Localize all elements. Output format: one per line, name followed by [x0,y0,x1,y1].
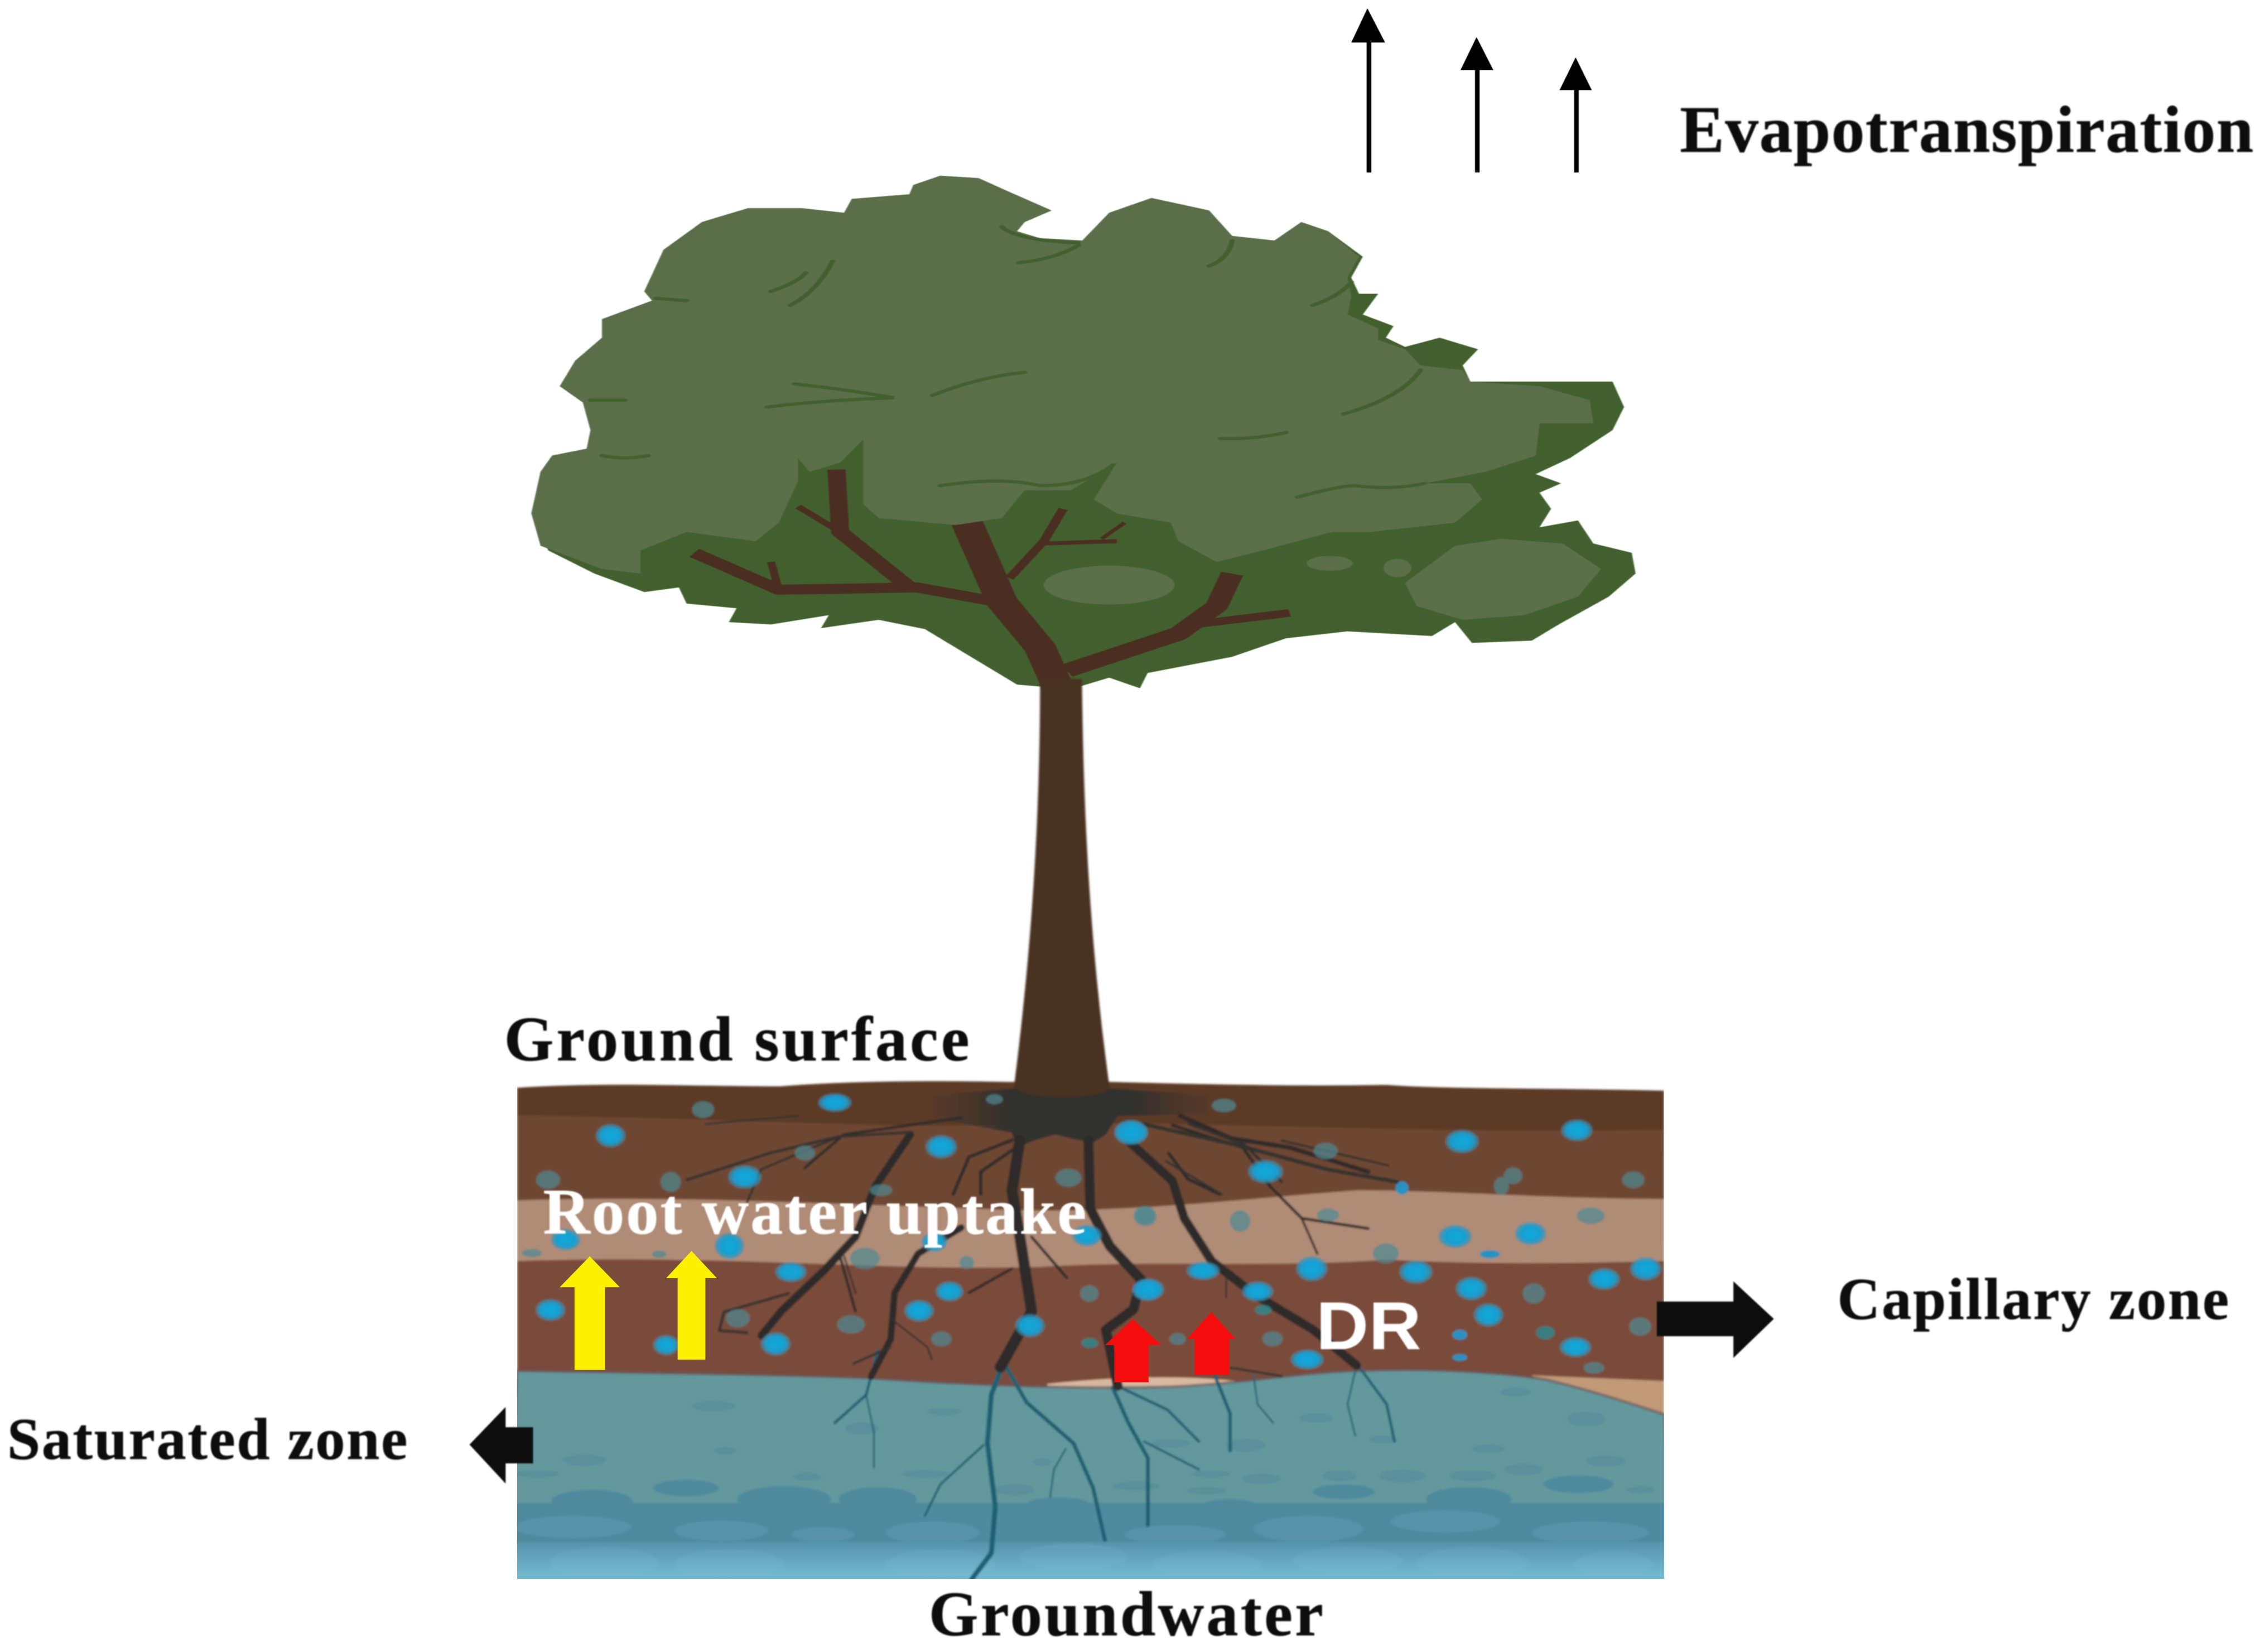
yellow arrows [560,1251,717,1370]
water droplets right [1082,1099,1661,1374]
foliage creases [590,227,1424,497]
tree branches [694,469,1290,694]
label: Ground surface: Ground surface [504,1003,969,1074]
foliage highlights [1044,539,1601,620]
soil and groundwater block [502,1081,1692,1589]
fine roots left [687,1116,932,1364]
water blobs [502,1388,1692,1584]
evapotranspiration arrows [1351,8,1592,172]
roots in groundwater [835,1350,1395,1579]
label: Saturated zone: Saturated zone [7,1406,407,1472]
roots near crown [762,1088,1368,1386]
label: DR: DR [1316,1288,1421,1364]
capillary zone arrow [1657,1282,1774,1358]
label: Capillary zone: Capillary zone [1838,1266,2229,1332]
tree canopy [531,176,1636,694]
label: Evapotranspiration: Evapotranspiration [1680,93,2253,166]
tree trunk [1014,679,1110,1097]
label: Groundwater: Groundwater [929,1578,1323,1649]
fine roots right [1143,1124,1397,1376]
groundwater layer [517,1368,1664,1504]
label: Root water uptake: Root water uptake [543,1176,1086,1248]
red arrows [1105,1312,1236,1383]
water droplets left [522,1094,1162,1355]
saturated zone arrow [470,1407,533,1484]
soil layers [517,1081,1664,1394]
